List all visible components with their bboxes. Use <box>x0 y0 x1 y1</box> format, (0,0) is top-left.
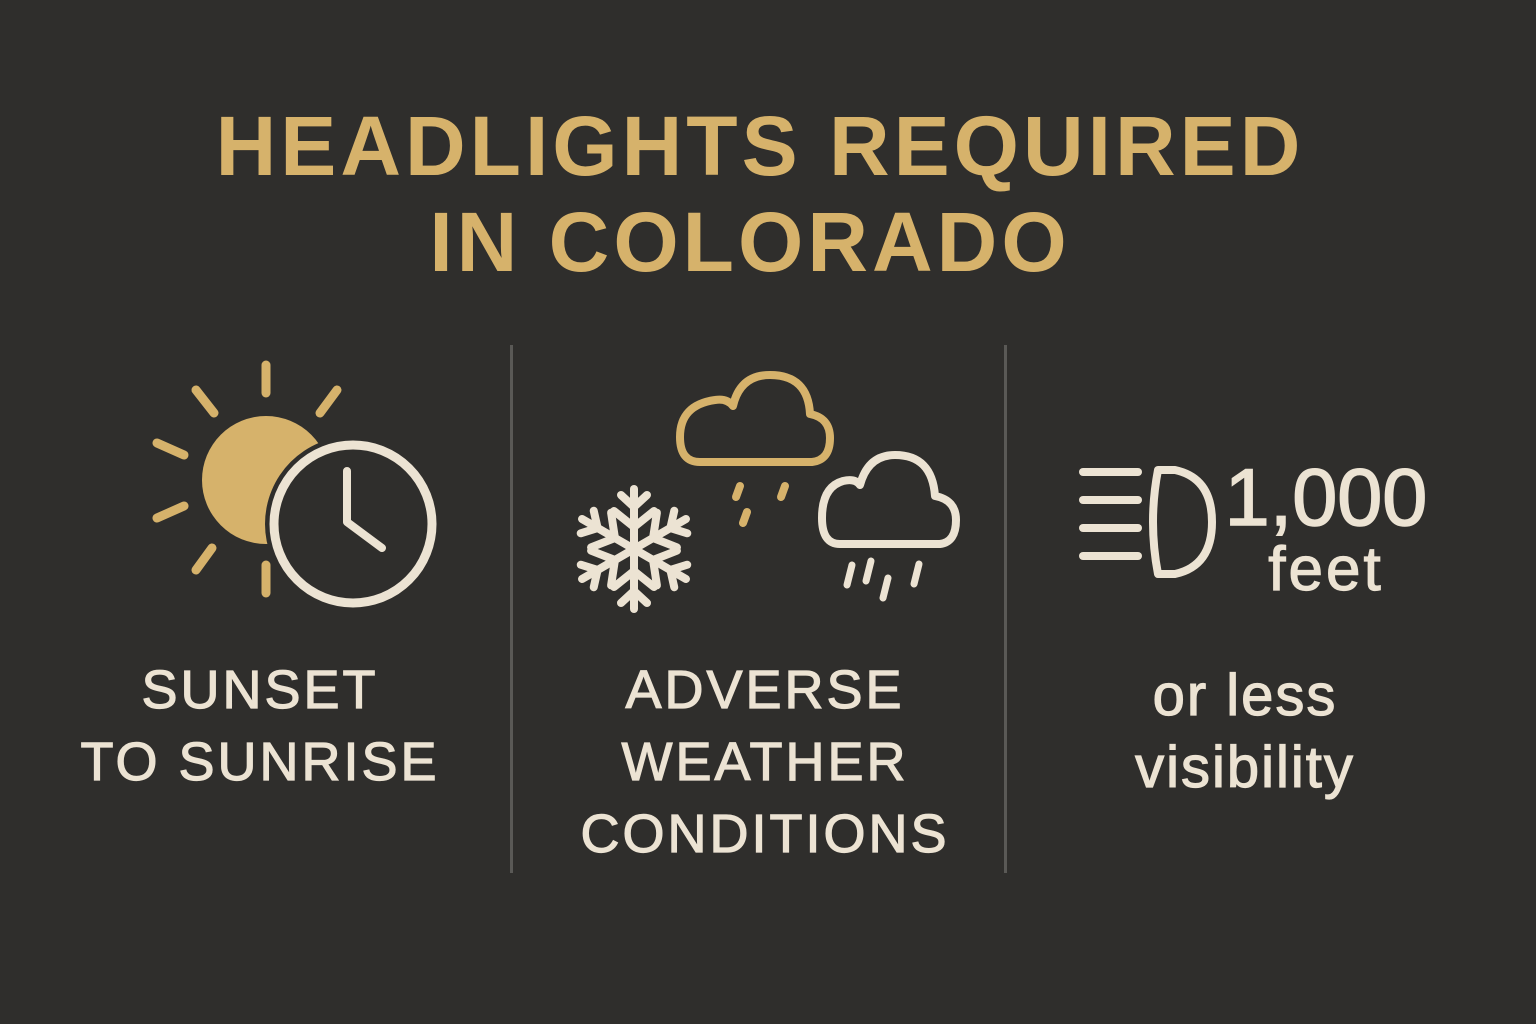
title: HEADLIGHTS REQUIRED <box>216 99 1304 193</box>
label: sunset to sunrise: TO SUNRISE <box>80 732 440 792</box>
label: sunset to sunrise: SUNSET <box>141 660 379 720</box>
title: IN COLORADO <box>429 195 1071 289</box>
label: or less visibility: visibility <box>1135 735 1355 800</box>
label: adverse weather conditions <box>580 660 950 864</box>
label: sunset to sunrise <box>80 660 440 792</box>
label: or less visibility: or less <box>1153 663 1337 728</box>
label: adverse weather conditions: CONDITIONS <box>580 804 950 864</box>
icon: headlight <box>1079 466 1216 578</box>
text: 1,000 feet <box>1225 453 1427 604</box>
icon: sun and clock <box>152 360 436 608</box>
text: 1,000 feet: 1,000 <box>1225 453 1427 543</box>
label: adverse weather conditions: WEATHER <box>622 732 908 792</box>
label: adverse weather conditions: ADVERSE <box>625 660 905 720</box>
icon: weather <box>576 371 960 613</box>
title <box>216 99 1304 289</box>
label: or less visibility <box>1134 663 1355 800</box>
text: 1,000 feet: feet <box>1268 535 1384 604</box>
